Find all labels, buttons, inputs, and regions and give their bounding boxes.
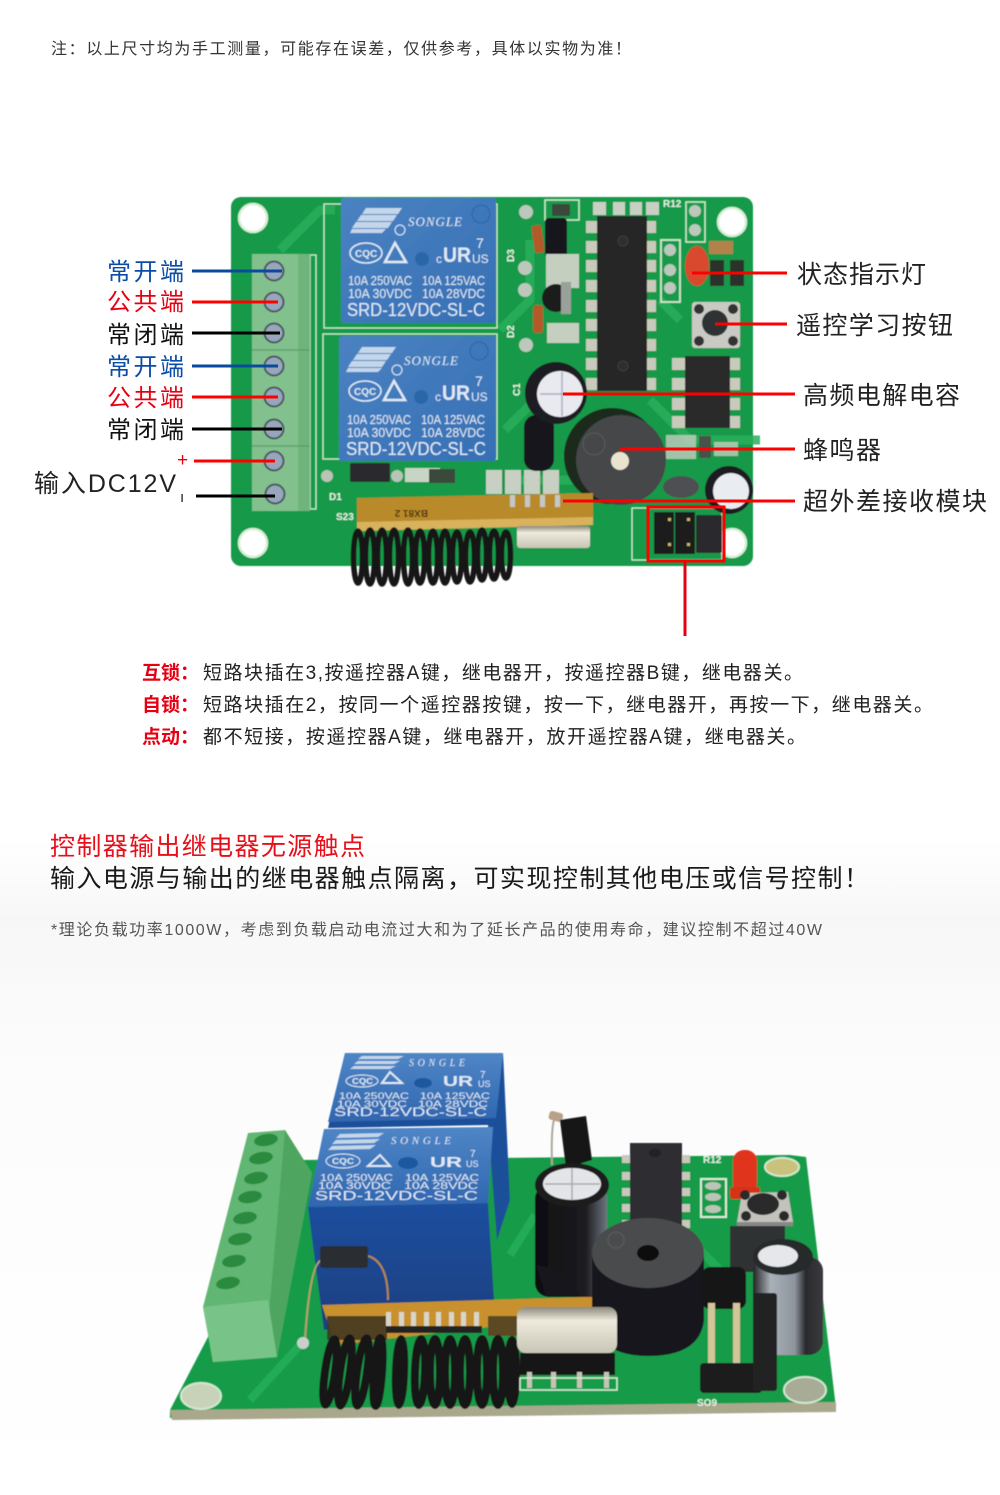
- relay 1: 10A 28VDC: [422, 286, 485, 301]
- front relay: SONGLE: [391, 1135, 451, 1147]
- jumper and pins: [700, 1267, 777, 1393]
- label: input DC12V: 输入DC12V: [34, 470, 176, 498]
- small transistor and lead: [548, 1110, 592, 1168]
- back relay: UR: [443, 1073, 473, 1090]
- main IC U1: [586, 202, 659, 391]
- label: common 1: 公共端: [107, 289, 184, 316]
- front relay: 10A 28VDC: [404, 1181, 478, 1192]
- terminal block: [203, 1130, 312, 1362]
- callout: receiver module: 超外差接收模块: [803, 488, 987, 516]
- label: normally open 2: 常开端: [107, 354, 184, 381]
- receiver module board: [336, 493, 593, 548]
- back relay: SRD-12VDC-SL-C: [334, 1105, 488, 1119]
- back relay: 10A 30VDC: [337, 1099, 407, 1110]
- logo stripes: [346, 347, 396, 372]
- receiver module: [322, 1296, 618, 1345]
- small IC U2: [672, 356, 740, 428]
- self-lock mode: 短路块插在2，按同一个遥控器按键，按一下，继电器开，再按一下，继电器关。: [203, 694, 933, 716]
- front relay: 7: [470, 1149, 476, 1160]
- relay 2: US: [471, 390, 488, 404]
- relay 2: 7: [475, 373, 483, 389]
- red LED: [730, 1150, 760, 1199]
- tactile learn button: [692, 302, 740, 348]
- silkscreen relay boxes: [310, 204, 722, 560]
- left component column: diodes and transistors: [506, 200, 579, 471]
- callout: HF capacitor: 高频电解电容: [803, 382, 960, 410]
- pcb edge: [170, 1402, 836, 1420]
- relay 1: SONGLE: [408, 214, 462, 229]
- left component column: diodes and transistors: D2: [506, 325, 517, 338]
- relay 1: SRD-12VDC-SL-C: [347, 300, 485, 320]
- back relay: CQC: [352, 1077, 373, 1086]
- relay 1: 7: [476, 235, 484, 251]
- relay 1: c: [436, 252, 442, 266]
- IC chip: [622, 1143, 690, 1233]
- diode D1 and resistor pads: D1: [329, 492, 342, 503]
- right capacitor: [753, 1239, 823, 1355]
- small IC: [730, 1226, 785, 1272]
- pcb board: [170, 1155, 836, 1418]
- pcb traces: [280, 210, 760, 480]
- crystal Y1 pads and pad block: [661, 199, 744, 302]
- label: input DC12V: [34, 450, 275, 506]
- section heading: 控制器输出继电器无源触点: [50, 833, 365, 861]
- label: input DC12V: +: [177, 450, 188, 471]
- pcb board: [231, 197, 753, 566]
- right component callouts: [563, 261, 987, 636]
- screw terminals: [264, 262, 284, 504]
- jumper header: [654, 512, 722, 554]
- front relay: 10A 250VAC: [320, 1173, 393, 1184]
- crystal pads: R12: [703, 1155, 722, 1166]
- right capacitor: [705, 466, 753, 514]
- receiver module board: BX81 2: [394, 507, 428, 518]
- label: normally closed 1: 常闭端: [107, 322, 184, 349]
- callout: learn button: 遥控学习按钮: [796, 312, 953, 340]
- callout: buzzer: 蜂鸣器: [803, 437, 881, 465]
- relay 1: CQC: [355, 249, 377, 260]
- back relay: 10A 250VAC: [339, 1091, 409, 1102]
- diode on wire leads: [297, 1246, 388, 1349]
- front relay: 10A 30VDC: [318, 1181, 391, 1192]
- section heading: [50, 833, 869, 893]
- jumper mode descriptions: [142, 662, 933, 748]
- front relay: US: [466, 1159, 479, 1169]
- terminal block: [252, 254, 310, 511]
- relay 1: UR: [443, 244, 471, 267]
- front relay: UR: [430, 1154, 462, 1171]
- crystal can: [517, 1307, 617, 1390]
- back relay: [328, 1053, 510, 1240]
- relay 2: 10A 30VDC: [347, 425, 411, 440]
- callout: jumper box and leader: [648, 507, 724, 636]
- relay 1: US: [472, 252, 489, 266]
- left component column: diodes and transistors: C1: [512, 383, 523, 396]
- left wiring callouts: [34, 259, 282, 506]
- spring antenna: [354, 530, 510, 584]
- back relay: 10A 28VDC: [418, 1099, 488, 1110]
- label: input DC12V: ı: [180, 489, 184, 506]
- interlock mode: 互锁：: [142, 662, 199, 684]
- capacitor: [535, 1163, 609, 1297]
- relay 2: [339, 336, 496, 461]
- front relay: [308, 1127, 494, 1330]
- relay 2: c: [435, 390, 441, 404]
- relay 1: 10A 250VAC: [348, 273, 412, 288]
- receiver module board: S23: [336, 512, 354, 523]
- red LED: [685, 246, 709, 286]
- note: measurements: 注：以上尺寸均为手工测量，可能存在误差，仅供参考，具体以实物为准！: [51, 40, 631, 58]
- momentary mode: 点动：: [142, 726, 199, 748]
- front relay: SRD-12VDC-SL-C: [315, 1188, 478, 1203]
- back relay: SONGLE: [409, 1058, 465, 1069]
- small SMD group right of buzzer: [663, 435, 738, 498]
- back relay: 10A 125VAC: [420, 1091, 490, 1102]
- relay 2: SONGLE: [404, 353, 458, 368]
- relay 2: CQC: [354, 387, 376, 398]
- crystal Y1 pads and pad block: R12: [663, 199, 682, 210]
- mounting holes: [181, 1158, 826, 1409]
- relay 2: 10A 28VDC: [421, 425, 485, 440]
- relay 2: 10A 125VAC: [421, 412, 485, 427]
- spring antenna: [320, 1338, 516, 1406]
- terminal screw holes: [215, 1132, 279, 1291]
- section heading: 输入电源与输出的继电器触点隔离，可实现控制其他电压或信号控制！: [50, 865, 869, 893]
- relay 1: [341, 198, 496, 323]
- background fade: [0, 840, 1000, 1495]
- relay 1: 10A 125VAC: [422, 273, 485, 288]
- interlock mode: 短路块插在3,按遥控器A键，继电器开，按遥控器B键，继电器关。: [203, 662, 803, 684]
- self-lock mode: 自锁：: [142, 694, 199, 716]
- back relay: 7: [480, 1070, 486, 1081]
- relay 1: 10A 30VDC: [348, 286, 412, 301]
- photo: top view of relay board: [231, 197, 760, 584]
- label: normally closed 2: 常闭端: [107, 417, 184, 444]
- front relay: CQC: [332, 1157, 354, 1166]
- callout: status LED: 状态指示灯: [797, 261, 926, 289]
- left component column: diodes and transistors: D3: [506, 249, 517, 262]
- back relay: US: [478, 1079, 491, 1089]
- high-frequency electrolytic capacitor: [525, 362, 587, 424]
- diode D1 and resistor pads: [321, 463, 559, 503]
- pcb lighter traces: [250, 1215, 720, 1400]
- relay 2: SRD-12VDC-SL-C: [346, 439, 486, 459]
- footnote: *理论负载功率1000W，考虑到负载启动电流过大和为了延长产品的使用寿命，建议控制不超过40W: [51, 921, 823, 939]
- photo: perspective view of relay board: [170, 1053, 836, 1420]
- momentary mode: 都不短接，按遥控器A键，继电器开，放开遥控器A键，继电器关。: [203, 726, 806, 748]
- label: common 2: 公共端: [107, 385, 184, 412]
- tactile button: [737, 1190, 793, 1226]
- relay 2: UR: [442, 382, 470, 405]
- front relay: 10A 125VAC: [405, 1173, 479, 1184]
- SO9 silk mark: SO9: [697, 1398, 717, 1409]
- buzzer: [564, 408, 666, 505]
- logo stripes: [350, 208, 402, 233]
- mounting holes: [239, 204, 746, 557]
- label: normally open 1: 常开端: [107, 259, 184, 286]
- buzzer: [592, 1218, 704, 1356]
- crystal pads: [701, 1155, 726, 1217]
- relay 2: 10A 250VAC: [347, 412, 411, 427]
